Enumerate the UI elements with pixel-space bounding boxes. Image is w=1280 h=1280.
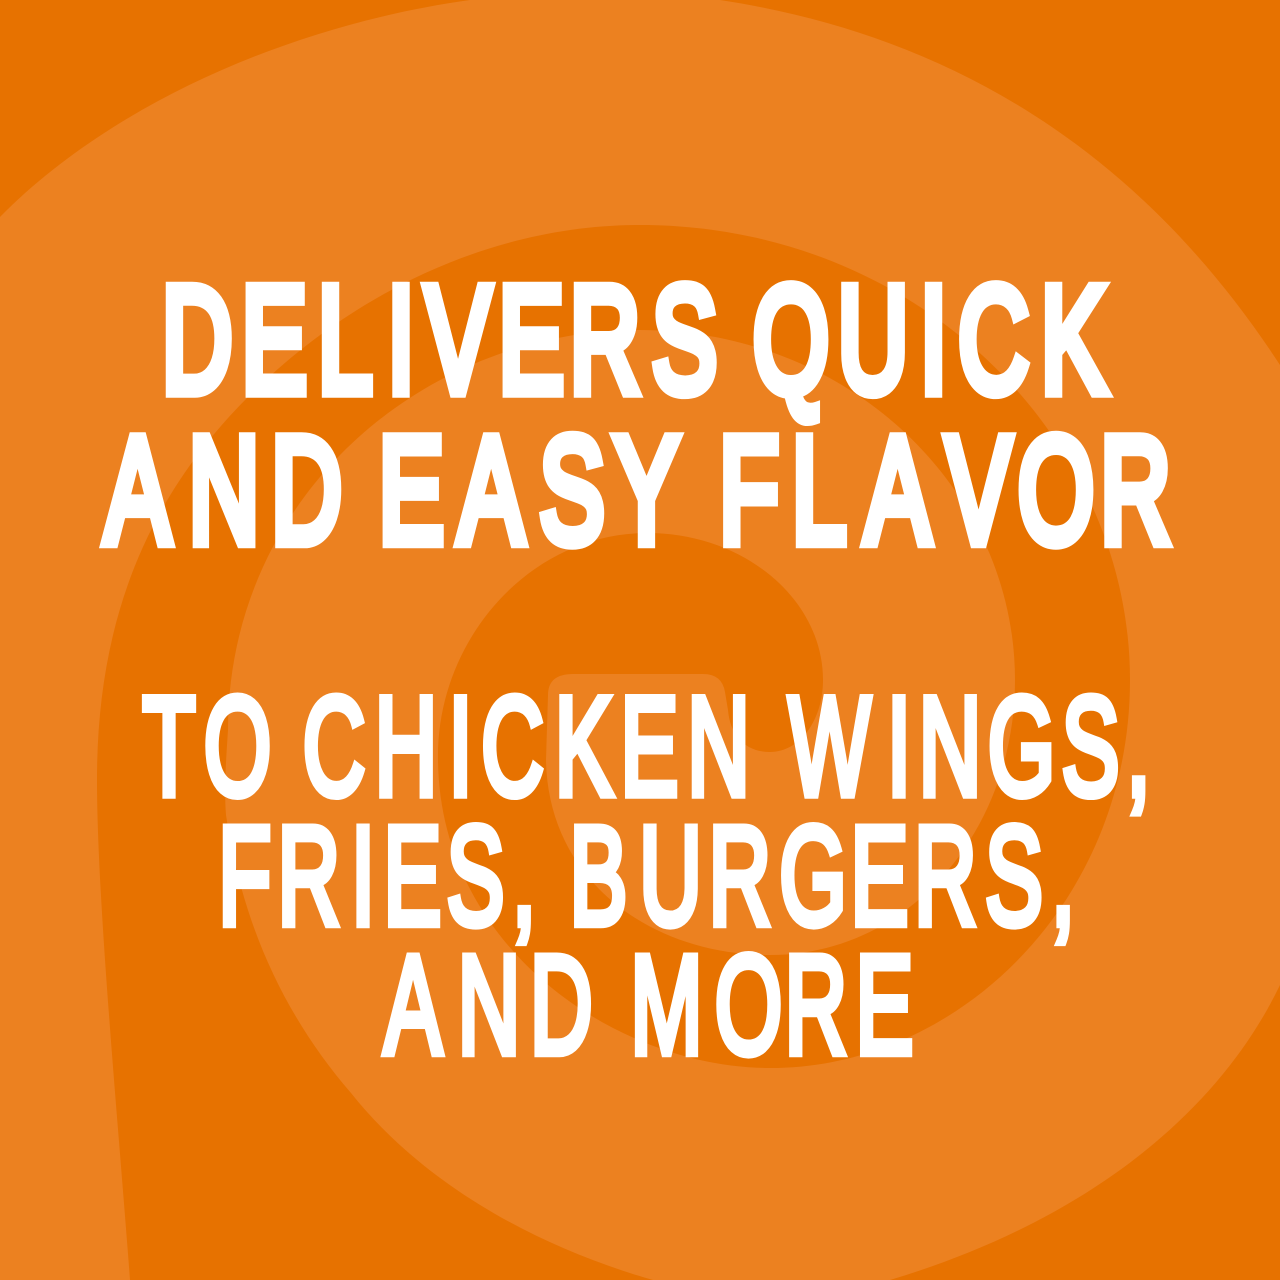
- heading line 2: AND EASY FLAVOR: [105, 406, 1171, 574]
- subheading: to chicken wings, fries, burgers, and more: [143, 668, 1151, 1083]
- heading: delivers quick and easy flavor: [105, 255, 1171, 574]
- subheading line 1: TO CHICKEN WINGS,: [143, 668, 1151, 825]
- subheading line 2: FRIES, BURGERS,: [218, 798, 1075, 954]
- subheading line 3: AND MORE: [384, 927, 913, 1083]
- heading line 1: DELIVERS QUICK: [162, 255, 1106, 423]
